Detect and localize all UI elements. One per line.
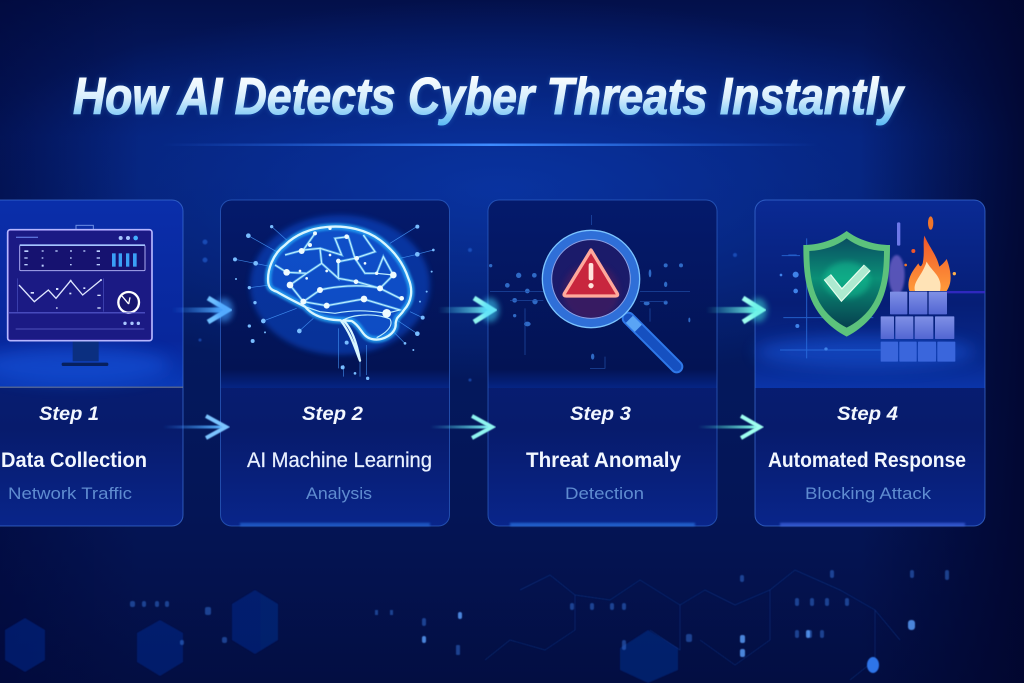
title: How AI Detects Cyber Threats Instantly: [73, 68, 906, 126]
step description: Detection: [565, 484, 644, 503]
title underline: [160, 144, 820, 146]
arrow: step 2 to 3, lower: [430, 416, 492, 438]
panel: step 3: [488, 200, 717, 526]
step title: Threat Anomaly: [526, 449, 681, 472]
step label: Step 4: [837, 404, 898, 425]
icon: shield, firewall and flame: [780, 216, 985, 362]
panel: step 4: [755, 200, 985, 526]
arrow: step 3 to 4, lower: [698, 416, 760, 438]
arrow: step 1 to 2, lower: [163, 416, 226, 438]
icon: magnifying glass with warning triangle: [542, 230, 677, 367]
icon: data dots behind magnifier: [489, 215, 690, 368]
step title: AI Machine Learning: [247, 449, 432, 472]
background pattern: hexagons and data dots: [1, 240, 949, 683]
arrow: step 1 to 2, upper: [172, 298, 233, 322]
step label: Step 3: [570, 404, 631, 425]
panel: step 2: [220, 200, 450, 526]
arrow: step 3 to 4, upper: [706, 298, 767, 322]
step description: Blocking Attack: [805, 484, 932, 503]
icon: computer monitor dashboard: [8, 225, 152, 366]
icon: glowing neural brain: [233, 215, 435, 380]
arrow: step 2 to 3, upper: [438, 298, 499, 322]
step label: Step 1: [39, 404, 99, 425]
step description: Analysis: [306, 484, 372, 503]
step title: Data Collection: [1, 449, 147, 472]
title: How AI Detects Cyber Threats Instantly: [73, 68, 906, 126]
step label: Step 2: [302, 404, 363, 425]
panel: step 1: [0, 200, 183, 526]
step description: Network Traffic: [8, 484, 133, 503]
step title: Automated Response: [768, 449, 966, 472]
